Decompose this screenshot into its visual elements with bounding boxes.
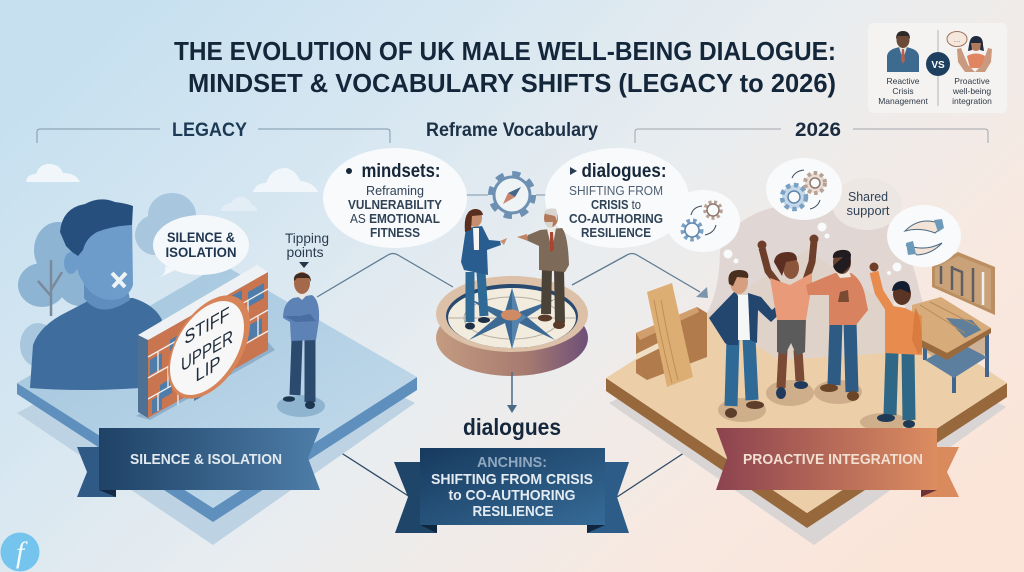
person: woman in blue suit [461,209,507,330]
arrowheads [696,287,708,298]
person: older man in brown suit [517,208,569,329]
label: reactive crisis management: Reactive [886,76,920,86]
icon: proactive person with cupped hands: ... [954,35,960,44]
title [174,36,836,98]
grey glow behind group [706,202,935,360]
bubble: mindsets: mindsets: [362,161,440,182]
ribbon: anchors shifting from crisis [394,448,629,533]
label: reactive crisis management [878,76,928,106]
timber stack [636,283,707,387]
thought dots: large gears [818,222,830,238]
speech bubble: silence and isolation [152,215,249,281]
bubble: small gears [666,190,740,252]
section header: legacy [37,120,390,143]
bubble: dialogues [545,148,689,248]
bubble: shared support: support [846,203,890,218]
label: proactive well-being integration: well-being [952,86,991,96]
bubble: mindsets: AS EMOTIONAL [350,211,440,226]
wall lettering: UPPER [181,325,233,376]
tape over mouth [112,273,126,287]
bubble: shared support: Shared [848,189,888,204]
label: tipping points: Tipping [285,230,329,246]
label: reactive crisis management: Crisis [892,86,914,96]
icon: compass gear [491,174,533,216]
wall lettering [181,302,233,387]
bubble: mindsets [323,148,467,248]
ribbon: anchors shifting from crisis: to CO-AUTHORING [448,487,576,504]
ribbon: anchors shifting from crisis: ANCHINS: [477,454,547,471]
bubble: helping hands [887,205,961,267]
bubble: dialogues: CO-AUTHORING [569,211,663,226]
bubble: dialogues: dialogues: [582,161,666,182]
section header: legacy: LEGACY [172,120,247,141]
title: MINDSET & VOCABULARY SHIFTS (LEGACY to 2026) [188,68,836,98]
connector from bubbles to gear [465,194,548,196]
connector lines [317,254,700,497]
person: woman with raised arms [758,234,818,406]
logo badge [0,532,40,572]
thought dots: helping hands [887,262,902,275]
person: man in navy jacket [709,270,790,422]
panel: legacy platform [17,193,417,545]
person: tipping-point figure [277,272,325,417]
label: proactive well-being integration [952,76,992,106]
ribbon: anchors shifting from crisis: SHIFTING FROM CRISIS [431,471,593,488]
ribbon: silence and isolation [77,428,320,497]
ribbon: proactive integration [716,428,959,497]
person: man raising fist [860,262,922,431]
label: proactive well-being integration: Proactive [954,76,990,86]
section header: 2026: 2026 [795,120,841,141]
arrow: compass to dialogues [507,372,517,413]
wall lettering: LIP [196,351,220,387]
wall tool rack [932,252,995,315]
comparison card: reactive vs proactive [868,23,1007,113]
title: THE EVOLUTION OF UK MALE WELL-BEING DIALOGUE: [174,36,836,66]
bubble: mindsets: Reframing [366,183,424,198]
background trees [18,193,210,367]
panel: 2026 platform [606,202,1007,545]
bubble: dialogues: RESILIENCE [581,225,651,240]
label: reactive crisis management: Management [878,96,928,106]
compass [436,276,588,376]
VS badge: VS [931,60,945,71]
label: tipping points [285,230,329,268]
compass star [469,288,555,349]
bubble: mindsets: FITNESS [370,225,420,240]
speech bubble: silence and isolation: SILENCE & [167,229,235,245]
ribbon: anchors shifting from crisis: RESILIENCE [472,503,554,520]
speech bubble: silence and isolation: ISOLATION [166,244,236,260]
heading: dialogues: dialogues [463,414,561,440]
bubble: mindsets: VULNERABILITY [348,197,442,212]
logo badge: f [16,536,28,569]
label: tipping points: points [286,244,324,260]
ribbon: proactive integration: PROACTIVE INTEGRATION [743,451,923,468]
bubble: dialogues: CRISIS to [591,197,641,212]
workbench [912,297,991,393]
bubble: shared support [832,178,902,230]
label: proactive well-being integration: integration [952,96,992,106]
decorative clouds [26,164,318,211]
icon: reactive manager [887,31,919,72]
section header: reframe vocabulary: Reframe Vocabulary [426,120,598,141]
bubble: dialogues: SHIFTING FROM [569,183,663,198]
brick wall: stiff upper lip [136,265,275,420]
section header: 2026 [635,120,988,143]
person: bearded man [806,250,868,404]
large silenced man [30,199,162,390]
thought dots: small gears [724,250,738,264]
ribbon: silence and isolation: SILENCE & ISOLATION [130,451,282,468]
bubble: large gears [766,158,842,220]
wall lettering: STIFF [185,302,229,349]
